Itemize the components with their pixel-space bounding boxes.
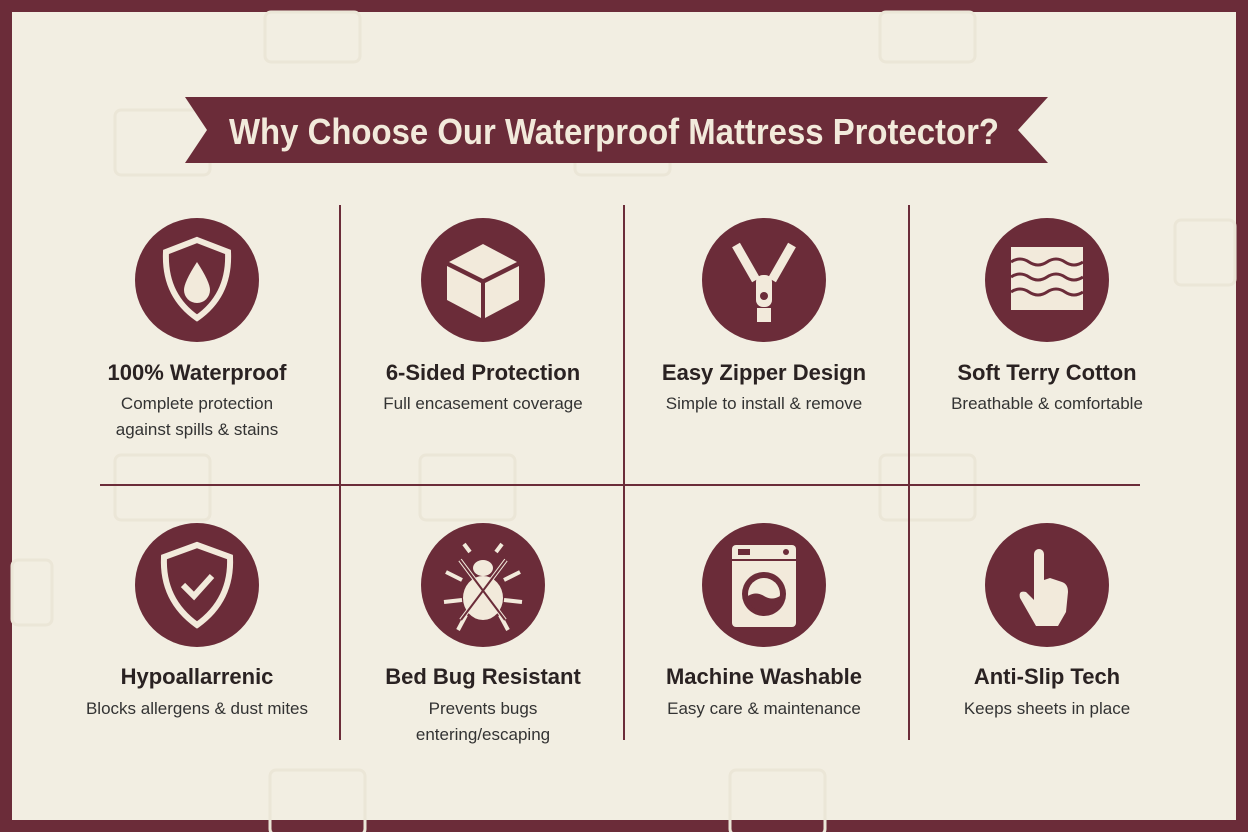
icon: bug crossed <box>421 523 545 647</box>
feature: bed bug: Bed Bug Resistant <box>385 664 581 689</box>
feature: anti-slip <box>964 523 1130 718</box>
icon: cube <box>421 218 545 342</box>
feature: bed bug: entering/escaping <box>416 725 550 744</box>
icon: shield drop <box>135 218 259 342</box>
icon: zipper <box>702 218 826 342</box>
title banner <box>185 97 1048 163</box>
feature: waterproof <box>108 218 287 439</box>
icon: washing machine <box>702 523 826 647</box>
title: Why Choose Our Waterproof Mattress Protector? <box>229 111 999 152</box>
feature: 6-sided: 6-Sided Protection <box>386 360 580 385</box>
feature: terry cotton <box>951 218 1143 413</box>
feature: hypoallergenic <box>86 523 308 718</box>
feature: washable: Machine Washable <box>666 664 862 689</box>
feature: anti-slip: Anti-Slip Tech <box>974 664 1120 689</box>
feature: hypoallergenic: Hypoallarrenic <box>121 664 273 689</box>
feature: 6-sided: Full encasement coverage <box>383 394 583 413</box>
feature: bed bug <box>385 523 581 744</box>
feature: 6-sided <box>383 218 583 413</box>
icon: fabric <box>985 218 1109 342</box>
feature: zipper <box>662 218 866 413</box>
feature: terry cotton: Soft Terry Cotton <box>957 360 1137 385</box>
feature: waterproof: Complete protection <box>121 394 273 413</box>
feature: waterproof: against spills & stains <box>116 420 278 439</box>
feature: zipper: Simple to install & remove <box>666 394 862 413</box>
feature: hypoallergenic: Blocks allergens & dust mites <box>86 699 308 718</box>
feature: anti-slip: Keeps sheets in place <box>964 699 1130 718</box>
feature: terry cotton: Breathable & comfortable <box>951 394 1143 413</box>
feature: waterproof: 100% Waterproof <box>108 360 287 385</box>
feature: zipper: Easy Zipper Design <box>662 360 866 385</box>
feature: washable: Easy care & maintenance <box>667 699 861 718</box>
feature: bed bug: Prevents bugs <box>429 699 537 718</box>
icon: shield check <box>135 523 259 647</box>
feature: washable <box>666 523 862 718</box>
icon: hand pointer <box>985 523 1109 647</box>
